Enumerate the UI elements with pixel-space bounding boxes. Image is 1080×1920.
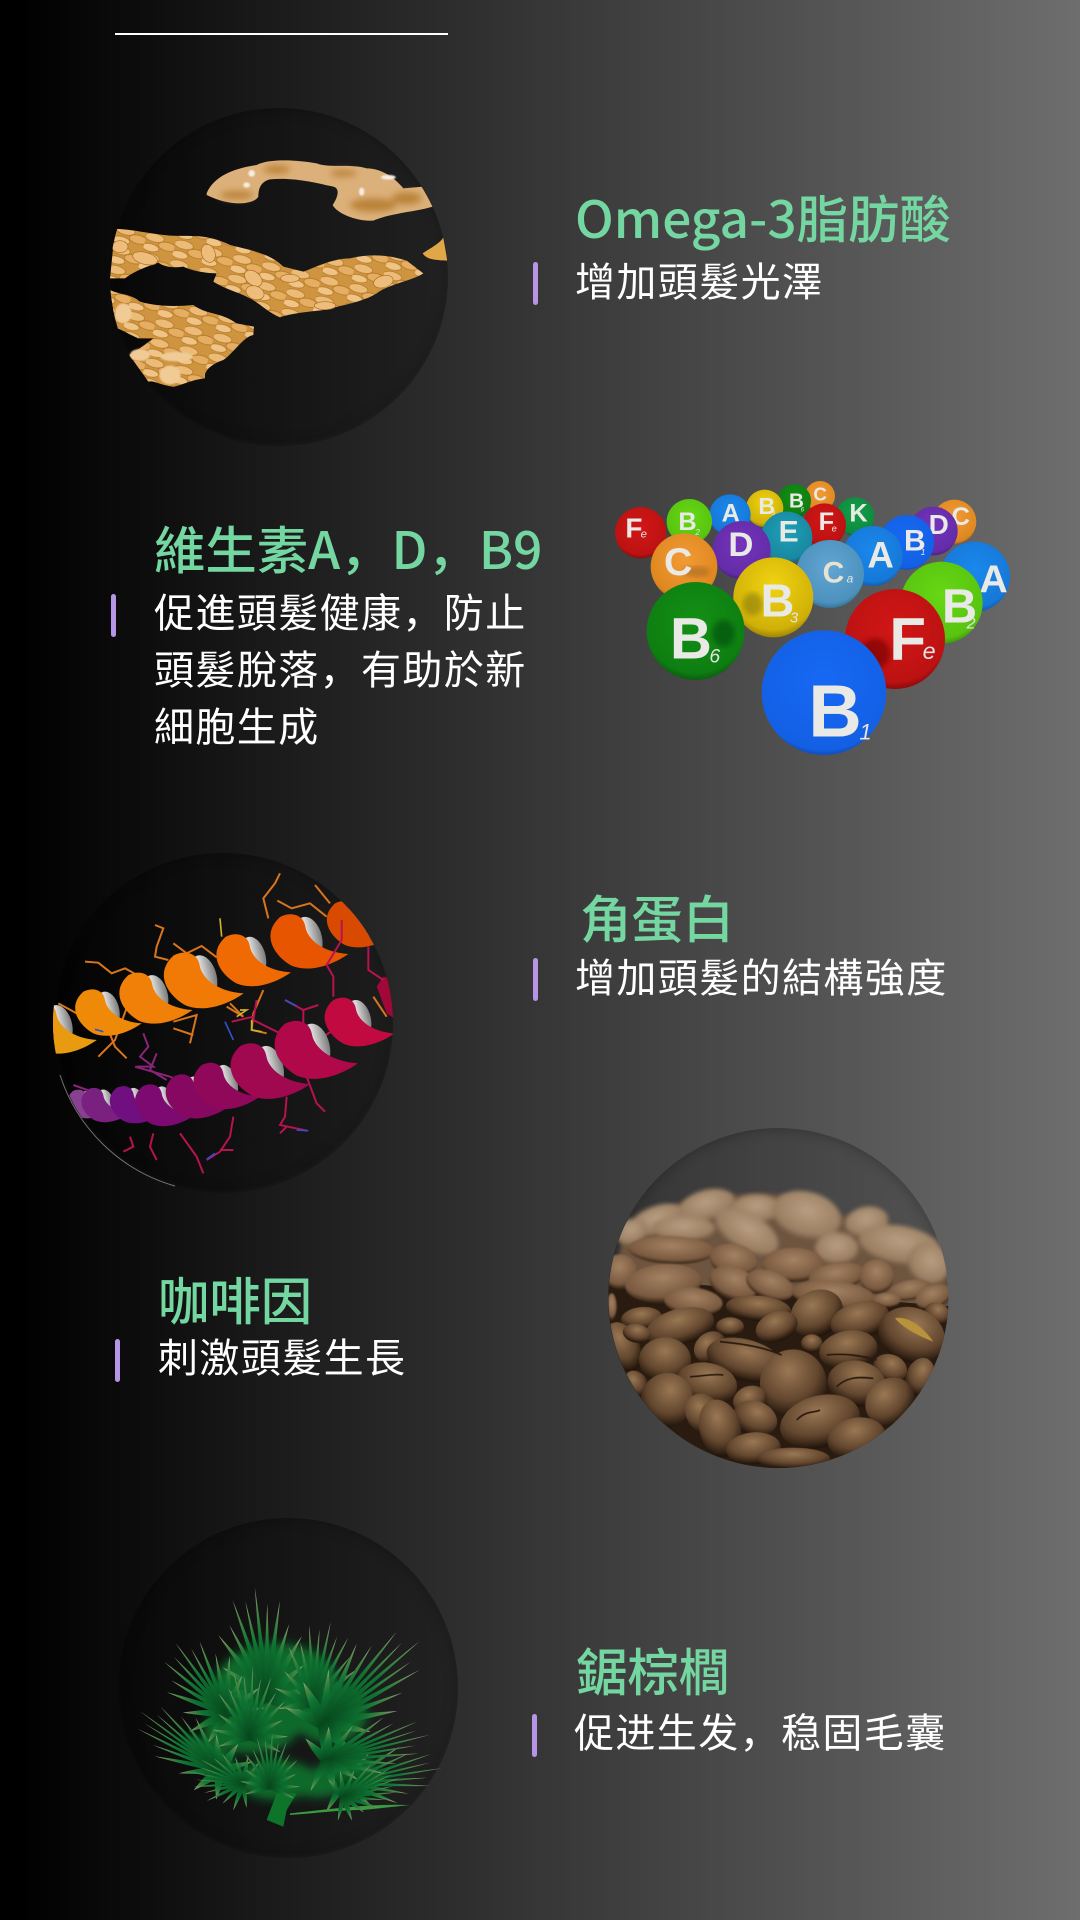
icon: flax seeds in circle — [110, 108, 448, 446]
panel: caffeine — [115, 1128, 948, 1468]
illustration: vitamin balls: B — [758, 493, 775, 519]
heading: vitamins: 維生素A，D，B9 — [154, 509, 542, 584]
illustration: vitamin balls: a — [847, 572, 854, 586]
text: vitamins benefit: 細胞生成 — [154, 695, 320, 753]
illustration: vitamin balls: 6 — [801, 508, 805, 514]
illustration: vitamin balls: C — [664, 540, 692, 584]
icon: protein circle — [53, 853, 393, 1193]
heading: omega-3: Omega-3脂肪酸 — [575, 178, 951, 253]
accent bar — [115, 1339, 120, 1382]
illustration: vitamin balls: B — [942, 580, 977, 634]
illustration: vitamin balls: K — [849, 500, 868, 528]
illustration: vitamin balls: B — [904, 525, 926, 558]
illustration: vitamin balls: A — [867, 534, 894, 575]
accent bar — [111, 594, 116, 637]
text: caffeine benefit: 刺激頭髮生長 — [158, 1326, 406, 1384]
illustration: vitamin balls: 3 — [772, 510, 776, 517]
illustration: vitamin balls: 6 — [709, 646, 720, 667]
illustration: vitamin balls: F — [889, 606, 926, 673]
text: saw palmetto benefit: 促进生发，稳固毛囊 — [574, 1701, 947, 1759]
illustration: flax seed clusters — [110, 160, 448, 387]
heading: keratin: 角蛋白 — [580, 878, 734, 953]
text: omega-3 benefit: 增加頭髮光澤 — [575, 250, 823, 308]
illustration: vitamin balls: C — [952, 503, 970, 531]
illustration: coffee beans — [608, 1186, 948, 1468]
illustration: vitamin balls: A — [979, 558, 1008, 602]
top rule — [115, 33, 448, 35]
icon: palm circle — [118, 1518, 458, 1858]
accent bar — [533, 958, 538, 1001]
illustration: vitamin balls: 2 — [966, 615, 976, 632]
illustration: vitamin balls: F — [819, 508, 834, 536]
illustration: vitamin balls: C — [823, 557, 844, 590]
illustration: vitamin balls: e — [923, 638, 936, 664]
panel: keratin — [53, 854, 948, 1186]
illustration: vitamin balls — [615, 481, 1010, 755]
accent bar — [533, 262, 538, 305]
illustration: vitamin balls: C — [813, 484, 827, 505]
accent bar — [532, 1714, 537, 1757]
panel: vitamins — [111, 481, 1010, 755]
illustration: vitamin balls: B — [808, 670, 862, 753]
illustration: vitamin balls: 1 — [859, 719, 872, 744]
icon: coffee circle — [608, 1128, 948, 1468]
panel: saw palmetto — [138, 1518, 947, 1854]
illustration: vitamin balls: D — [728, 526, 753, 564]
illustration: vitamin balls: 1 — [921, 547, 926, 557]
illustration: vitamin balls: 2 — [694, 528, 700, 537]
text: vitamins benefit: 頭髮脫落，有助於新 — [154, 638, 527, 696]
illustration: vitamin balls: D — [929, 509, 949, 540]
illustration: vitamin balls: A — [722, 500, 740, 528]
illustration: palm plant — [138, 1588, 442, 1826]
illustration: vitamin balls: B — [678, 508, 697, 536]
text: keratin benefit: 增加頭髮的結構強度 — [575, 946, 948, 1004]
illustration: vitamin balls: e — [641, 528, 647, 540]
illustration: vitamin balls: F — [625, 512, 642, 543]
illustration: vitamin balls: B — [670, 607, 712, 671]
text: vitamins benefit — [154, 581, 527, 753]
illustration: vitamin balls: B — [761, 575, 794, 627]
illustration: vitamin balls: e — [832, 524, 837, 534]
heading: caffeine: 咖啡因 — [158, 1260, 312, 1335]
illustration: vitamin balls: B — [789, 490, 804, 513]
illustration: vitamin balls: 3 — [790, 611, 799, 627]
text: vitamins benefit: 促進頭髮健康，防止 — [154, 581, 527, 639]
illustration: protein helix — [53, 872, 393, 1186]
heading: saw palmetto: 鋸棕櫚 — [576, 1631, 730, 1706]
panel: omega-3 — [110, 108, 951, 442]
illustration: vitamin balls: E — [779, 516, 799, 549]
